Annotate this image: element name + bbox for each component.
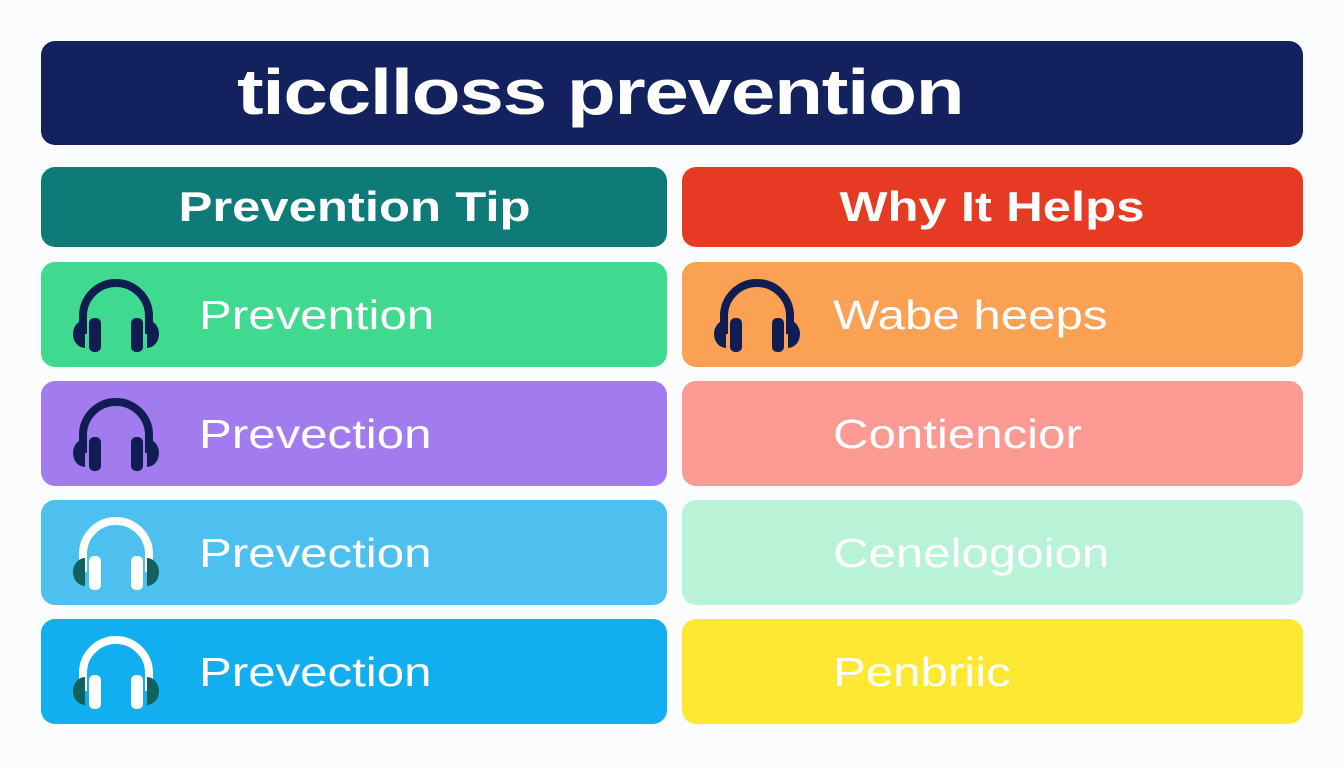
text: Contiencior (833, 411, 1082, 457)
row 3 right (682, 500, 1303, 605)
row 1 right (682, 262, 1303, 367)
icon: headphones (73, 398, 159, 471)
header: why it helps: Why It Helps (840, 183, 1145, 230)
text: Prevection (199, 530, 431, 576)
header: prevention tip: Prevention Tip (178, 183, 530, 230)
row 4 left (41, 619, 667, 724)
text: Cenelogoion (833, 530, 1109, 576)
row 4 right (682, 619, 1303, 724)
icon: headphones (73, 279, 159, 352)
text: Penbriic (833, 649, 1011, 695)
row 2 left (41, 381, 667, 486)
row 3 left (41, 500, 667, 605)
text: Prevection (199, 411, 431, 457)
icon: headphones (73, 636, 159, 709)
header: why it helps (682, 167, 1303, 247)
row 2 right (682, 381, 1303, 486)
icon: headphones (73, 517, 159, 590)
text: Prevention (199, 292, 434, 338)
text: Wabe heeps (833, 292, 1107, 338)
header: prevention tip (41, 167, 667, 247)
text: Prevection (199, 649, 431, 695)
title bar (41, 41, 1303, 145)
icon: headphones (714, 279, 800, 352)
row 1 left (41, 262, 667, 367)
title text: ticclloss prevention (237, 56, 963, 128)
